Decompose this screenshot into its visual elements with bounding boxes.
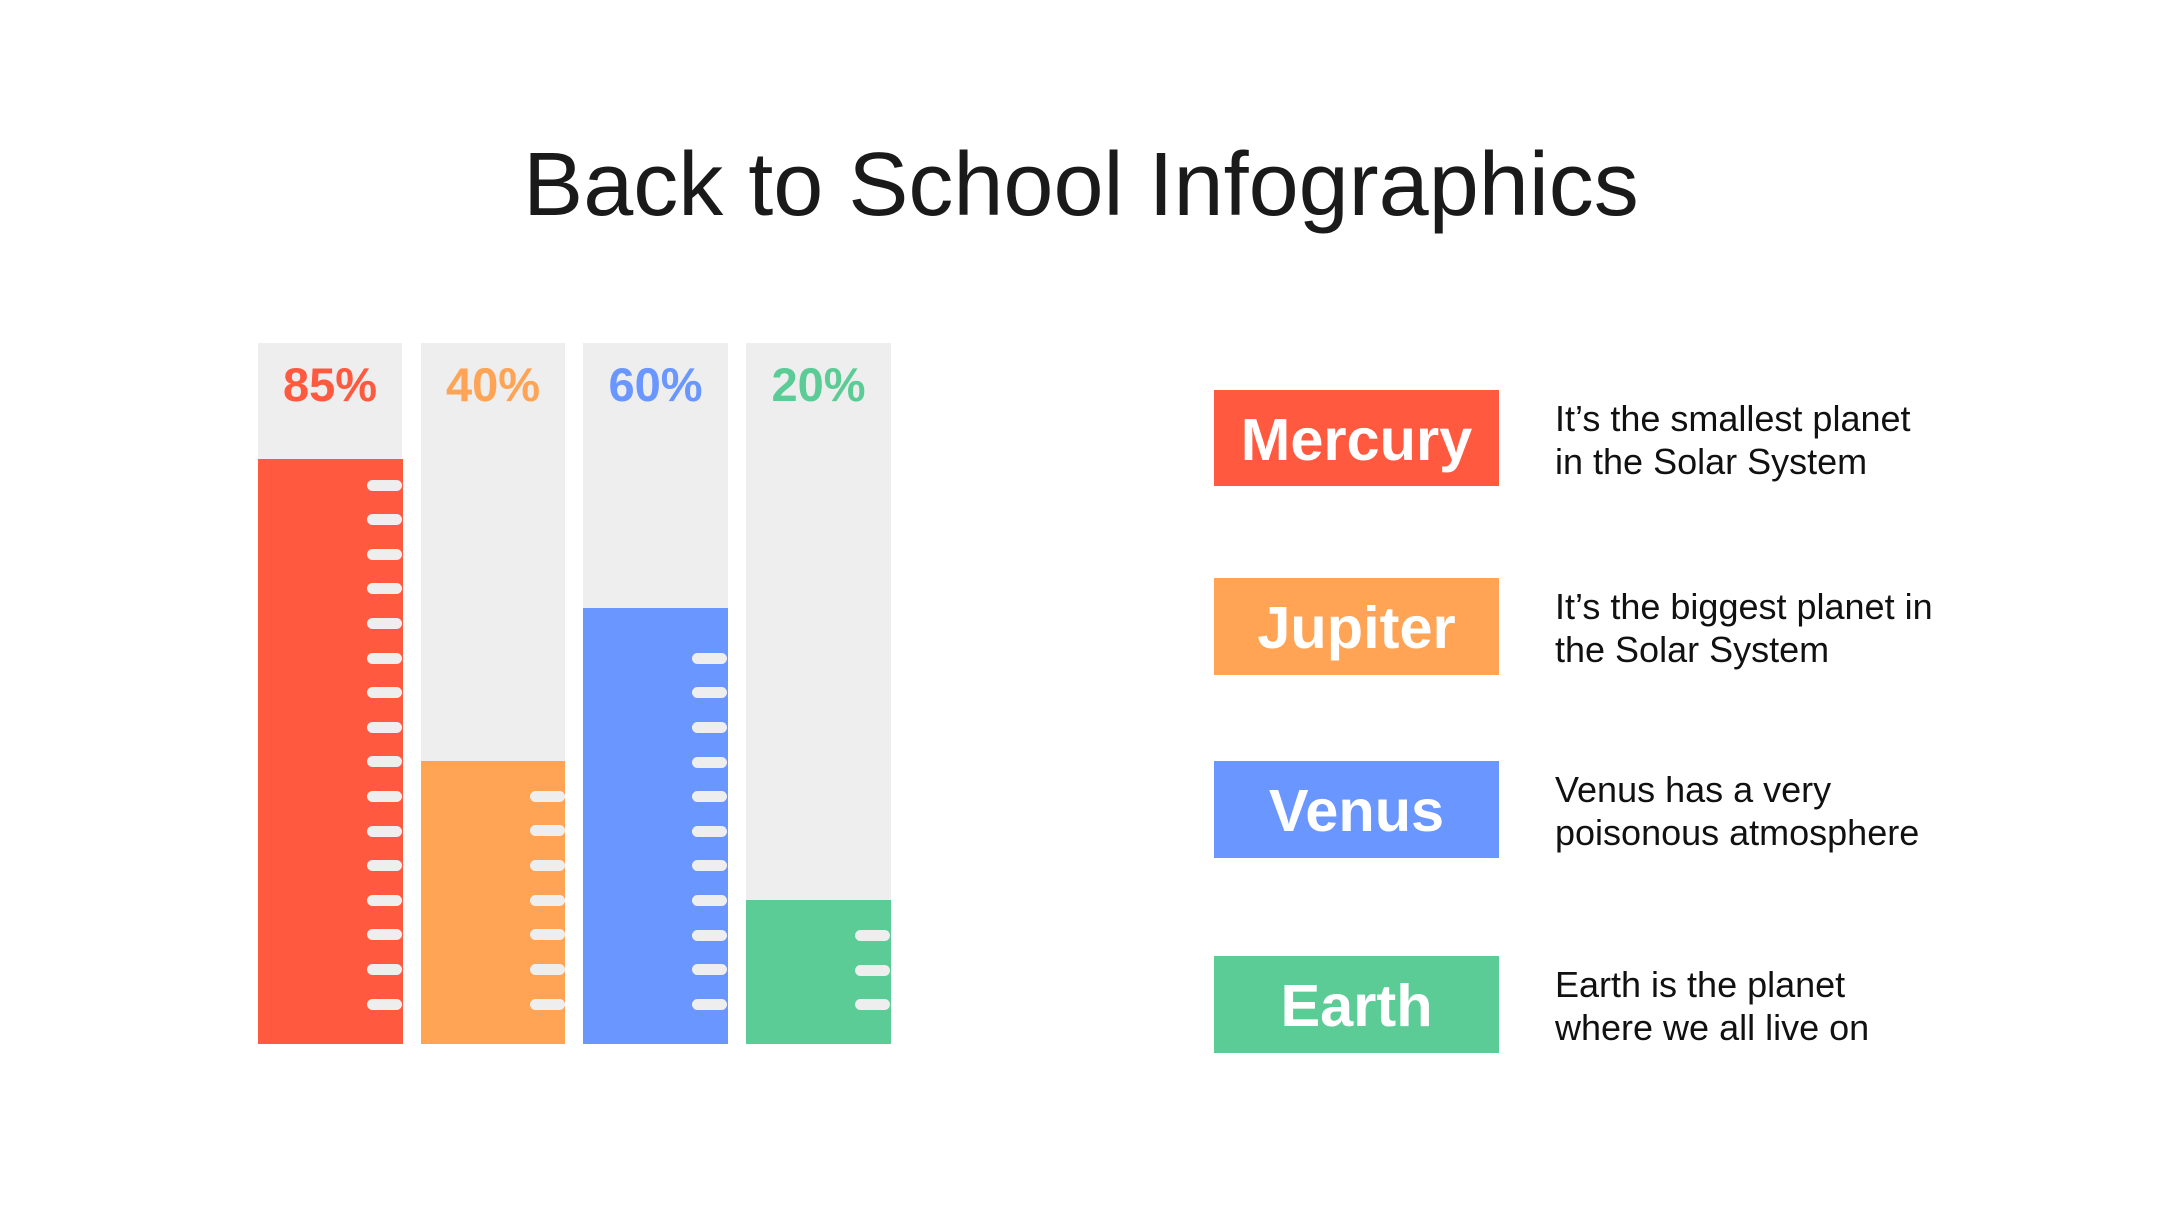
legend tag: Jupiter: Jupiter bbox=[1257, 594, 1456, 661]
legend tag: Earth: Earth bbox=[1280, 972, 1433, 1039]
fill: Earth bbox=[746, 900, 891, 1044]
description: Jupiter: It’s the biggest planet in bbox=[1555, 586, 1933, 627]
description: Venus: poisonous atmosphere bbox=[1555, 812, 1919, 853]
legend tag: Venus bbox=[1214, 761, 1499, 858]
label: 85%: 85% bbox=[283, 358, 377, 411]
description: Mercury bbox=[1555, 398, 1911, 482]
label: 60%: 60% bbox=[608, 358, 703, 411]
label: 40%: 40% bbox=[446, 358, 540, 411]
description: Earth: Earth is the planet bbox=[1555, 964, 1845, 1005]
fill: Mercury bbox=[258, 459, 403, 1044]
legend tag: Mercury: Mercury bbox=[1241, 406, 1472, 473]
legend tag: Jupiter bbox=[1214, 578, 1499, 675]
description: Venus bbox=[1555, 769, 1919, 853]
label: 20%: 20% bbox=[771, 358, 866, 411]
legend tag: Earth bbox=[1214, 956, 1499, 1053]
bar: Jupiter 40% bbox=[421, 343, 565, 1044]
description: Mercury: It’s the smallest planet bbox=[1555, 398, 1911, 439]
fill: Venus bbox=[583, 608, 728, 1044]
description: Earth: where we all live on bbox=[1555, 1007, 1869, 1048]
fill: Jupiter bbox=[421, 761, 565, 1044]
description: Jupiter bbox=[1555, 586, 1933, 670]
description: Venus: Venus has a very bbox=[1555, 769, 1831, 810]
legend tag: Mercury bbox=[1214, 390, 1499, 486]
bar: Mercury 85% bbox=[258, 343, 402, 1044]
bar chart bbox=[258, 343, 891, 1044]
description: Earth bbox=[1555, 964, 1869, 1048]
description: Mercury: in the Solar System bbox=[1555, 441, 1867, 482]
legend tag: Venus: Venus bbox=[1269, 777, 1444, 844]
bar: Venus 60% bbox=[583, 343, 728, 1044]
bar: Earth 20% bbox=[746, 343, 891, 1044]
title: Back to School Infographics bbox=[523, 135, 1639, 235]
description: Jupiter: the Solar System bbox=[1555, 629, 1829, 670]
